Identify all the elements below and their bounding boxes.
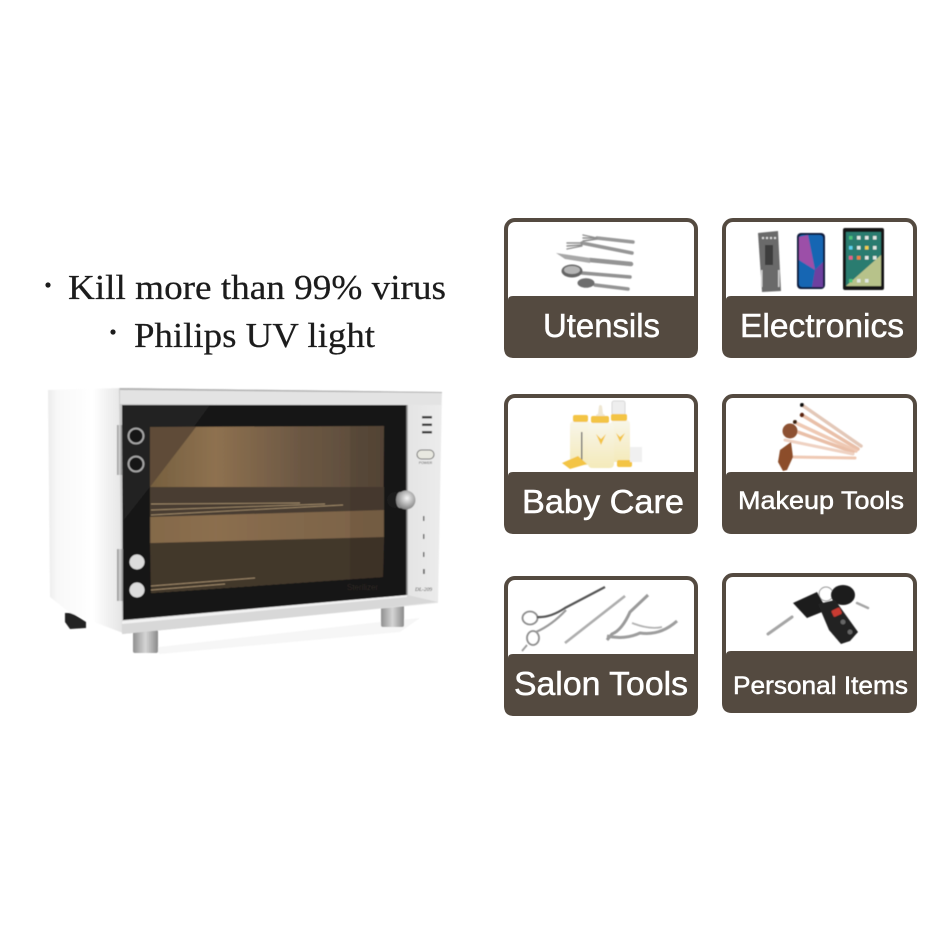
indicator lights	[423, 516, 425, 574]
window	[150, 426, 384, 593]
icon: car keys	[768, 585, 868, 644]
heading: features	[45, 268, 446, 355]
icon: scissors, pick and nippers	[522, 587, 677, 651]
brand mark: Sterilizer	[347, 583, 378, 592]
door glass	[122, 405, 407, 620]
front frame	[119, 388, 442, 634]
icon: cutlery	[556, 235, 633, 289]
power switch	[417, 450, 434, 465]
label: Electronics: Electronics	[740, 307, 904, 344]
label: Salon Tools: Salon Tools	[514, 665, 688, 702]
card: Makeup Tools	[722, 396, 917, 534]
card: Baby Care	[504, 396, 698, 534]
power switch: POWER	[419, 461, 433, 465]
icon: remote, phone, tablet	[758, 228, 884, 292]
label: Makeup Tools: Makeup Tools	[738, 487, 904, 515]
card: Utensils	[504, 220, 698, 358]
bullet: UV	[110, 329, 116, 335]
model number: DL-209	[414, 587, 432, 593]
hinges	[117, 425, 122, 475]
icon: makeup brushes	[778, 403, 861, 471]
label: Utensils: Utensils	[543, 307, 660, 344]
card: Personal Items	[722, 575, 917, 713]
label: Baby Care: Baby Care	[522, 483, 684, 520]
card: Salon Tools	[504, 578, 698, 716]
vent lines	[422, 416, 432, 434]
text: Philips UV: Philips UV light	[134, 316, 375, 355]
card: Electronics	[722, 220, 917, 358]
icon: baby bottles	[562, 401, 642, 469]
label: Personal Items: Personal Items	[733, 672, 908, 700]
product: UV sterilizer cabinet	[48, 388, 442, 654]
bullet: virus	[45, 282, 51, 288]
door buttons	[128, 428, 144, 598]
front feet	[133, 630, 158, 653]
back foot	[65, 613, 86, 629]
text: kill virus: Kill more than 99% virus	[68, 268, 446, 307]
door knob	[387, 490, 416, 510]
side wall	[48, 388, 123, 633]
